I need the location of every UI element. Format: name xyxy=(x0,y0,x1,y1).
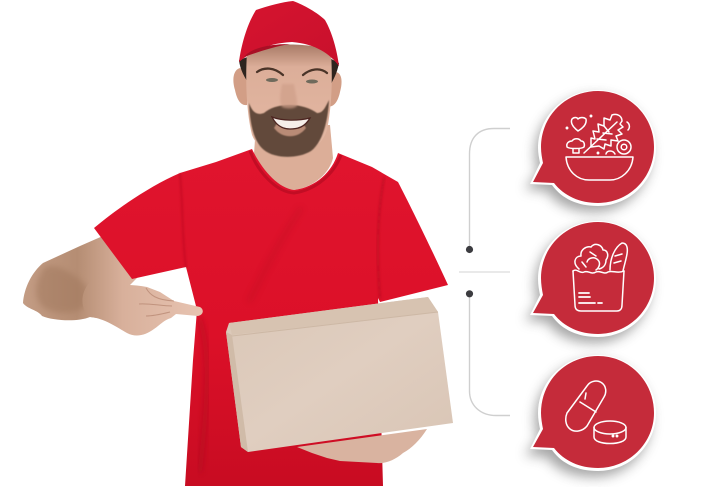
eyebrows xyxy=(257,69,327,75)
connector: upper bracket line xyxy=(466,128,510,253)
icon: capsule and tablet line art xyxy=(566,381,626,444)
lower hand under box xyxy=(297,429,427,463)
nose xyxy=(280,84,297,108)
icon bubble: pills xyxy=(525,355,656,477)
arm hair shading xyxy=(36,266,90,313)
neck xyxy=(254,125,333,190)
box left side panel xyxy=(226,332,248,452)
eyes xyxy=(266,78,318,84)
icon: grocery bag line art xyxy=(573,243,627,311)
person: delivery man xyxy=(23,1,453,486)
box xyxy=(226,297,453,463)
mouth xyxy=(272,117,310,129)
connector: lower bracket line xyxy=(466,290,510,416)
icon bubble: salad bowl xyxy=(525,90,656,212)
ears xyxy=(233,68,249,105)
upper arm behind sleeve xyxy=(23,232,140,322)
t-shirt body xyxy=(94,149,448,486)
beard xyxy=(249,100,329,157)
icon bubble: grocery bag xyxy=(525,221,656,343)
icon: salad bowl line art xyxy=(566,114,633,180)
lower lip area xyxy=(274,120,306,136)
box top flap fold xyxy=(229,297,438,335)
face xyxy=(246,44,332,157)
collar xyxy=(250,151,341,193)
connector: divider line xyxy=(459,271,510,273)
sleeve and fold shading xyxy=(180,174,384,470)
cap brim xyxy=(244,44,290,57)
cap crown xyxy=(239,1,339,66)
pointing hand over shirt xyxy=(82,282,203,336)
hair xyxy=(239,54,339,86)
